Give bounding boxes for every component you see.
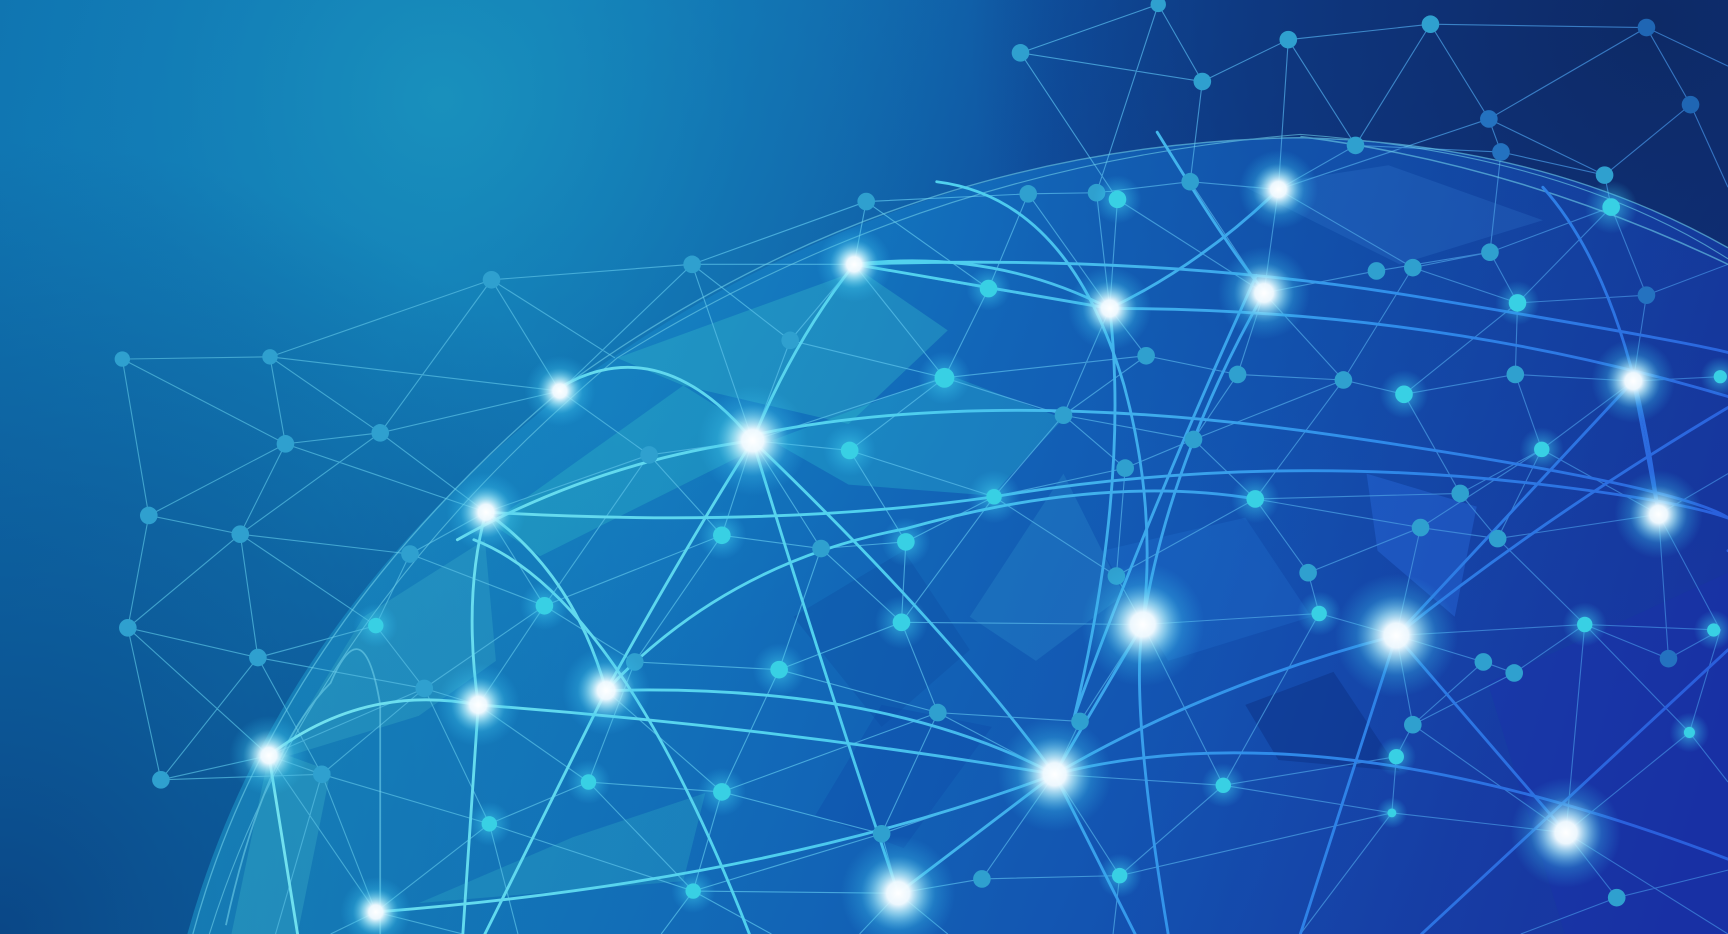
globe facets (231, 165, 1728, 934)
medium glowing nodes (354, 175, 1728, 913)
bright glowing hub nodes (229, 150, 1703, 934)
globe body (187, 138, 1728, 934)
bright great-circle arcs (269, 132, 1728, 934)
outer globe rim arcs (193, 134, 1728, 934)
